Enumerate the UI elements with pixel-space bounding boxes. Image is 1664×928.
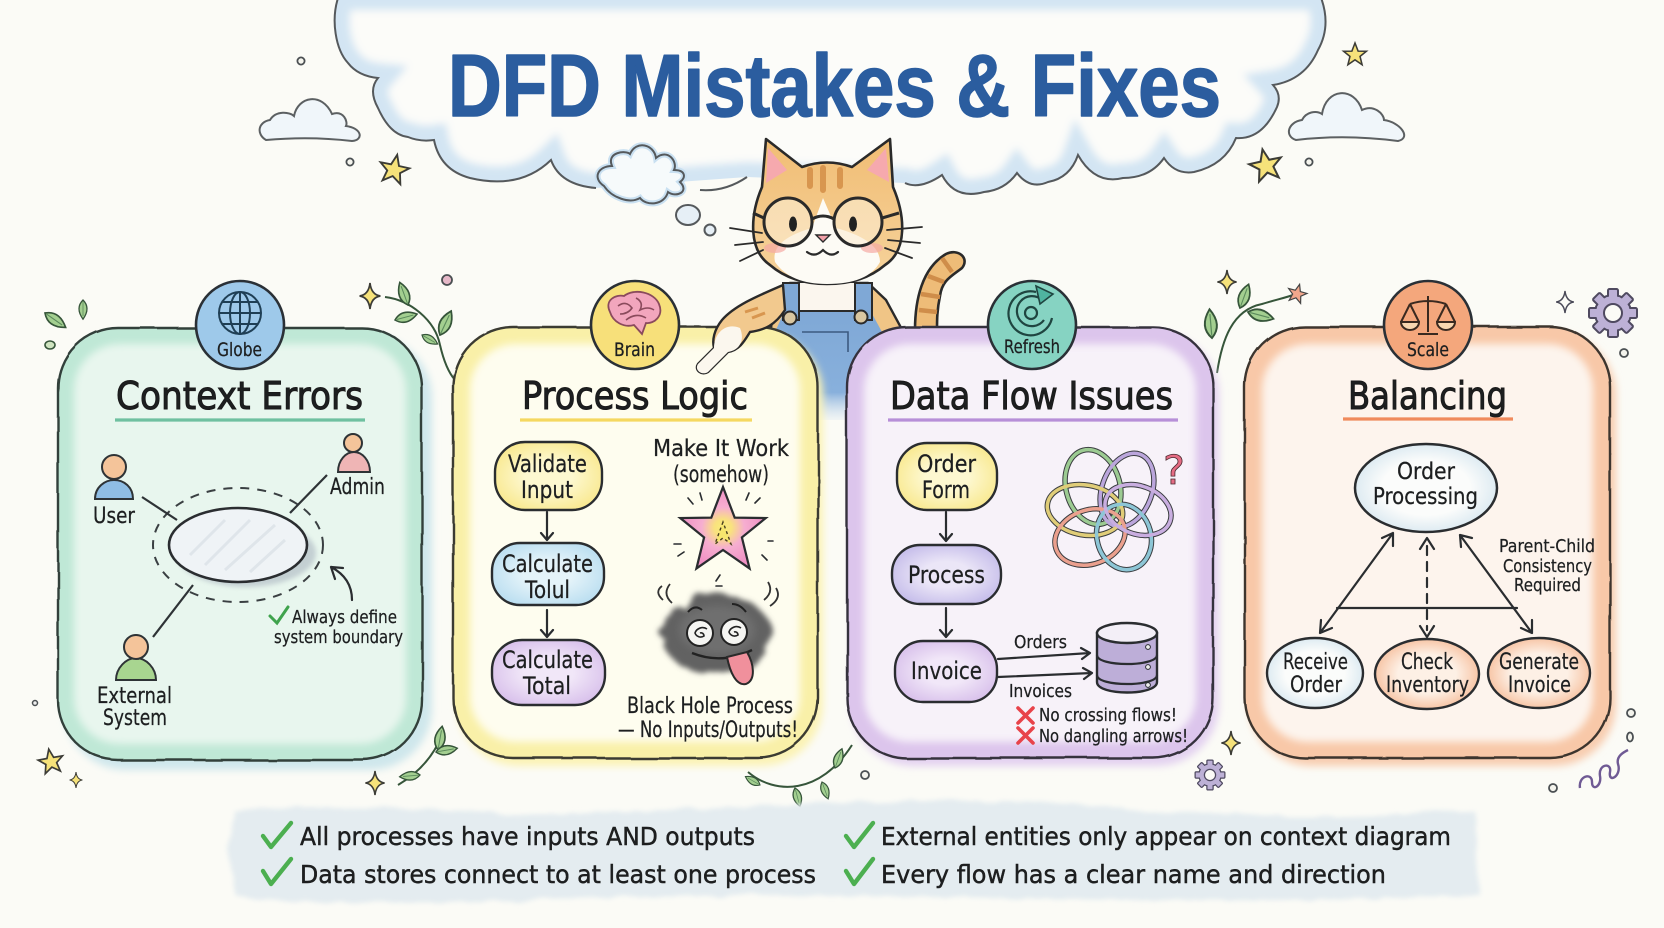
icon: refresh: Refresh (1004, 336, 1060, 358)
decorative leaves top left (42, 300, 87, 349)
panel 3 card (847, 327, 1219, 766)
text: make it work: Make It Work (653, 436, 790, 462)
bottom left decorations (32, 700, 82, 788)
text: parent-child consistency: Parent-Child (1499, 536, 1595, 557)
arrows to data store: Invoices (1009, 681, 1072, 702)
decorative dots around cloud (297, 57, 1313, 166)
text: black hole process: — No Inputs/Outputs! (618, 718, 798, 743)
vine bottom center (744, 745, 869, 808)
node: calculate total (492, 640, 605, 705)
icon: external system: System (103, 706, 167, 731)
node: order form (897, 443, 997, 510)
vine between panels 1 and 2 (360, 275, 456, 380)
icon: user (93, 455, 136, 529)
small cloud under header (598, 145, 684, 203)
icon: brain (591, 281, 679, 369)
icon: small gear (1195, 760, 1225, 790)
node: validate input: Input (521, 476, 573, 504)
star: upper left (377, 152, 412, 185)
panel 4 card (1245, 327, 1616, 766)
panel 1 card (58, 328, 432, 770)
right side cloud (1289, 93, 1404, 141)
cat tail (915, 252, 965, 330)
icon: external system (97, 635, 172, 731)
text: parent-child consistency (1499, 536, 1595, 596)
panel: data flow issues (847, 281, 1219, 766)
check 3: External entities only appear on context diagram (881, 822, 1451, 851)
node: receive order (1267, 638, 1363, 708)
arrow (541, 610, 553, 637)
icon: admin: Admin (330, 475, 385, 500)
cat arm pointing (697, 285, 785, 373)
check 1: All processes have inputs AND outputs (300, 822, 755, 851)
arrows to data store (998, 632, 1092, 702)
node: order processing (1355, 444, 1497, 532)
icon: scale: Scale (1407, 339, 1449, 361)
checklist banner (228, 800, 1480, 903)
warning: no crossing flows: No dangling arrows! (1039, 726, 1188, 747)
node: generate invoice (1488, 638, 1590, 708)
callout: always define system boundary: system boundary (274, 627, 403, 648)
header thought cloud (335, 0, 1326, 194)
node: generate invoice: Invoice (1508, 673, 1571, 698)
warning: no crossing flows: No crossing flows! (1039, 705, 1177, 726)
node: receive order: Order (1290, 673, 1343, 698)
node: validate input (495, 442, 602, 510)
heading: balancing: Balancing (1348, 374, 1507, 418)
node: order processing: Order (1397, 459, 1455, 485)
node: process: Process (908, 561, 985, 589)
arrow (541, 512, 553, 540)
text: black hole process (618, 694, 798, 743)
panel: process logic (453, 281, 823, 766)
icon: tangled flows (1043, 443, 1185, 576)
cat face (730, 198, 922, 284)
node: calculate tolul: Tolul (524, 576, 570, 604)
icon: data store (1097, 623, 1157, 692)
node: calculate total: Total (522, 672, 571, 700)
star: top right (1344, 43, 1366, 65)
vine bottom between panels 1 and 2 (365, 725, 458, 795)
callout: always define system boundary (270, 567, 403, 648)
check 2: Data stores connect to at least one process (300, 860, 816, 889)
node: order processing: Processing (1373, 484, 1478, 510)
icon: brain: Brain (614, 339, 655, 361)
cat head (753, 139, 902, 284)
heading: process logic: Process Logic (522, 374, 748, 418)
callout: always define system boundary: Always define (292, 607, 397, 628)
cat body with overalls (770, 283, 905, 420)
title: DFD Mistakes & Fixes (448, 36, 1221, 135)
panel: context errors (58, 281, 432, 770)
icon: large gear with sparkle (1556, 289, 1637, 357)
icon: refresh (988, 281, 1076, 369)
node: receive order: Receive (1283, 650, 1348, 675)
text: make it work (653, 436, 790, 488)
arrow (940, 608, 952, 637)
arrow (940, 512, 952, 541)
node: order form: Form (922, 476, 970, 504)
node: calculate tolul (492, 543, 604, 605)
node: check inventory: Check (1401, 650, 1453, 675)
icon: black hole blob (658, 582, 778, 684)
text: parent-child consistency: Required (1514, 575, 1581, 596)
text: make it work: (somehow) (673, 462, 769, 488)
banner wash (228, 800, 1480, 903)
arrows to data store: Orders (1014, 632, 1067, 653)
left side cloud (260, 99, 360, 141)
star: upper right (1247, 146, 1285, 183)
warning: no crossing flows (1018, 705, 1188, 747)
icon: magic star (674, 487, 773, 586)
thought bubbles (676, 205, 716, 236)
node: order form: Order (917, 450, 976, 478)
cat head and arm (697, 139, 922, 373)
system boundary diagram (142, 475, 327, 637)
node: validate input: Validate (508, 450, 587, 478)
cat stripes (810, 168, 840, 190)
arrows: parent to child (1320, 533, 1532, 637)
text: parent-child consistency: Consistency (1503, 556, 1592, 577)
bottom right squiggle and dots (1549, 709, 1635, 792)
icon: scale (1384, 281, 1472, 369)
heading: data flow issues: Data Flow Issues (890, 374, 1173, 418)
node: calculate tolul: Calculate (502, 550, 593, 578)
node: invoice: Invoice (911, 657, 982, 685)
icon: admin (330, 434, 385, 500)
node: check inventory (1375, 639, 1479, 709)
sparkle near gear (1221, 731, 1241, 755)
icon: globe: Globe (217, 339, 262, 361)
node: invoice (895, 641, 997, 702)
icon: user: User (93, 504, 136, 529)
node: generate invoice: Generate (1499, 650, 1579, 675)
check 4: Every flow has a clear name and direction (881, 860, 1386, 889)
icon: tangled flows: ? (1163, 448, 1185, 494)
icon: globe (196, 281, 284, 369)
text: black hole process: Black Hole Process (627, 694, 793, 719)
cat ears (766, 148, 889, 183)
node: process (892, 545, 1001, 604)
heading: context errors: Context Errors (116, 374, 363, 418)
node: check inventory: Inventory (1386, 673, 1469, 698)
icon: external system: External (97, 684, 172, 709)
vine between panels 3 and 4 (1204, 270, 1309, 373)
node: calculate total: Calculate (502, 646, 593, 674)
panel 2 card (453, 327, 823, 766)
panel: balancing (1245, 281, 1616, 766)
